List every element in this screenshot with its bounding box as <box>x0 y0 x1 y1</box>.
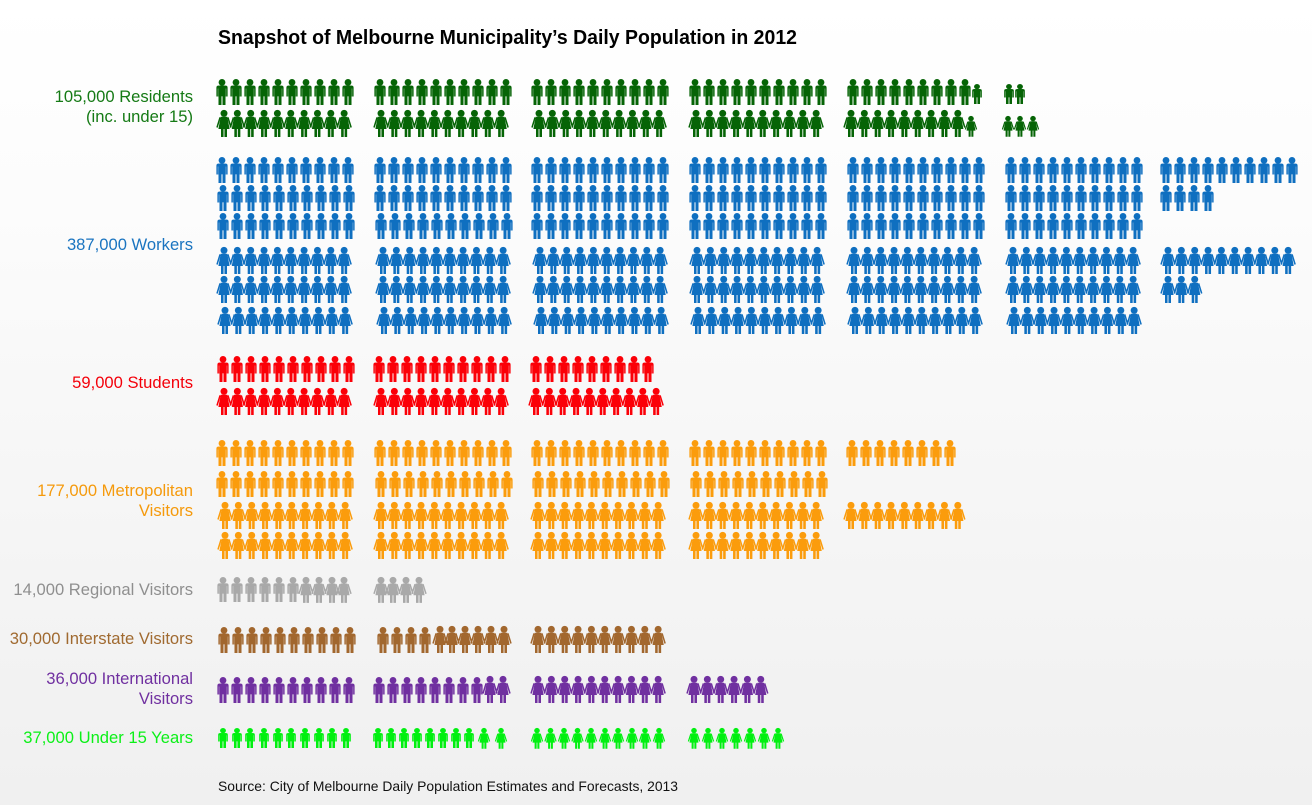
children group <box>218 728 784 749</box>
label: residents: (inc. under 15) <box>86 107 193 126</box>
label: residents: 105,000 Residents <box>55 87 193 106</box>
men row <box>217 356 654 382</box>
label: international visitors: Visitors <box>139 689 193 708</box>
pictogram: interstate visitors <box>218 626 665 653</box>
title: Snapshot of Melbourne Municipality’s Daily Population in 2012 <box>218 27 797 49</box>
men and women group <box>218 626 665 653</box>
women rows <box>218 502 965 559</box>
women row <box>217 110 1039 137</box>
men and women group <box>217 577 426 603</box>
women rows <box>217 247 1295 334</box>
label: international visitors: 36,000 International <box>46 669 193 688</box>
pictogram: regional visitors <box>217 577 426 603</box>
label: interstate visitors: 30,000 Interstate Visitors <box>10 629 193 648</box>
women row <box>217 388 663 415</box>
pictogram: residents <box>216 79 1039 137</box>
men rows <box>216 157 1298 239</box>
men rows <box>216 440 956 497</box>
pictogram: workers <box>216 157 1298 334</box>
men and women group <box>217 676 768 703</box>
label: under 15 years: 37,000 Under 15 Years <box>23 728 193 747</box>
label: students: 59,000 Students <box>72 373 193 392</box>
pictogram: students <box>217 356 663 415</box>
source note: Source: City of Melbourne Daily Population Estimates and Forecasts, 2013 <box>218 778 678 794</box>
pictogram: metropolitan visitors <box>216 440 965 559</box>
label: regional visitors: 14,000 Regional Visitors <box>13 580 193 599</box>
label: metropolitan visitors: 177,000 Metropolitan <box>37 481 193 500</box>
label: workers: 387,000 Workers <box>67 235 193 254</box>
label: metropolitan visitors: Visitors <box>139 501 193 520</box>
men row <box>216 79 1025 105</box>
pictogram: under 15 years <box>218 728 784 749</box>
pictogram: international visitors <box>217 676 768 703</box>
